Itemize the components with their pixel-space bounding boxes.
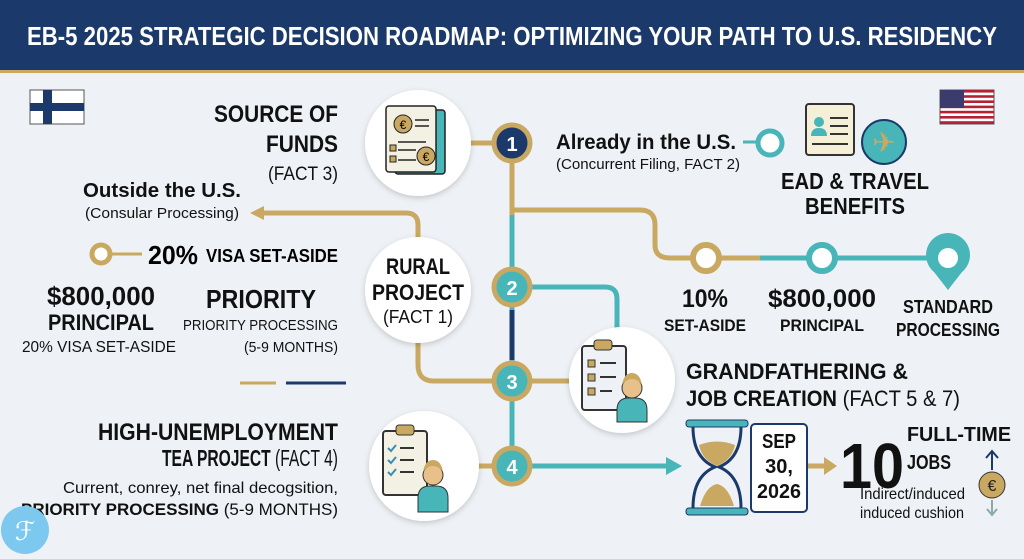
text: already in the US: [556, 131, 782, 173]
text: €: [400, 118, 407, 132]
icon: clipboard person (grandfathering): [569, 327, 675, 433]
icon: clipboard person (TEA): [369, 411, 479, 521]
date box: 2026: [757, 481, 801, 503]
date box: SEP: [762, 431, 796, 453]
10 full-time jobs: JOBS: [907, 452, 951, 474]
standard track nodes: [693, 233, 970, 290]
rural project circle: RURAL: [386, 254, 450, 279]
text: high unemployment: PRIORITY PROCESSING (5-9 MONTHS): [21, 500, 338, 519]
text: grandfathering & job creation: GRANDFATHERING &: [686, 359, 908, 384]
priority: [183, 284, 338, 356]
logo: [1, 506, 49, 554]
text: already in the US: (Concurrent Filing, FACT 2): [556, 156, 740, 173]
text: standard processing: [896, 297, 1000, 340]
icon: plane: [862, 120, 906, 164]
step nodes: [494, 125, 530, 484]
text: standard processing: STANDARD: [903, 297, 993, 317]
text: outside the US: (Consular Processing): [85, 205, 239, 222]
10 full-time jobs: 10: [840, 430, 904, 502]
text: 10% set-aside: 10%: [682, 285, 728, 313]
10 full-time jobs: [840, 424, 1011, 522]
priority: PRIORITY PROCESSING: [183, 317, 338, 334]
text: 10% set-aside: SET-ASIDE: [664, 316, 746, 335]
text: high unemployment: [21, 419, 338, 519]
text: high unemployment: HIGH-UNEMPLOYMENT: [98, 419, 338, 446]
icon: hourglass: [686, 420, 748, 515]
header bar: [0, 0, 1024, 73]
text: $800,000 principal right: PRINCIPAL: [780, 316, 864, 335]
logo: ℱ: [15, 517, 35, 547]
text: high unemployment: Current, conrey, net final decogsition,: [63, 480, 338, 497]
text: 10% set-aside: [664, 285, 746, 335]
$800,000 principal left: 20% VISA SET-ASIDE: [22, 339, 176, 356]
icon: euro coin with arrows: [979, 451, 1005, 515]
$800,000 principal left: PRINCIPAL: [48, 310, 154, 335]
text: €: [423, 150, 430, 164]
text: grandfathering & job creation: [686, 359, 960, 411]
text: grandfathering & job creation: JOB CREATION (FACT 5 & 7): [686, 386, 960, 411]
step nodes: 4: [506, 457, 518, 479]
flag: USA: [940, 90, 994, 124]
$800,000 principal left: $800,000: [47, 281, 155, 311]
flag: Finland: [30, 90, 84, 124]
icon: source of funds document: [365, 90, 471, 196]
rural project circle: [365, 237, 471, 343]
priority: (5-9 MONTHS): [244, 339, 338, 356]
connector lines: [262, 143, 935, 466]
text: $800,000 principal right: $800,000: [768, 285, 876, 313]
text: standard processing: PROCESSING: [896, 320, 1000, 340]
20% visa set-aside: VISA SET-ASIDE: [206, 246, 338, 266]
arrow: to outside: [250, 206, 264, 220]
text: already in the US: Already in the U.S.: [556, 131, 736, 154]
text: $800,000 principal right: [768, 285, 876, 335]
text: EAD & travel benefits: BENEFITS: [805, 193, 905, 219]
step nodes: 1: [506, 134, 518, 156]
20% visa set-aside: 20%: [148, 240, 198, 270]
20% visa set-aside: [92, 240, 338, 270]
text: EAD & travel benefits: EAD & TRAVEL: [781, 168, 929, 194]
text: source of funds: [214, 101, 338, 185]
legend lines: [240, 382, 346, 384]
step nodes: 3: [506, 372, 518, 394]
step nodes: 2: [506, 278, 518, 300]
arrow: to jobs: [808, 457, 837, 475]
arrow: to hourglass: [666, 457, 682, 475]
date box: [751, 424, 807, 512]
icon: euro coin with arrows: €: [988, 478, 997, 495]
text: source of funds: SOURCE OF: [214, 101, 338, 128]
rural project circle: (FACT 1): [383, 307, 453, 327]
date box: 30,: [765, 456, 793, 478]
icon: EAD card: [806, 104, 854, 155]
10 full-time jobs: Indirect/induced: [860, 486, 965, 503]
rural project circle: PROJECT: [372, 280, 464, 305]
text: EAD & travel benefits: [781, 168, 929, 219]
$800,000 principal left: [22, 281, 176, 356]
text: outside the US: Outside the U.S.: [83, 180, 241, 202]
text: source of funds: FUNDS: [266, 131, 338, 158]
icon: plane: ✈: [872, 126, 896, 159]
10 full-time jobs: FULL-TIME: [907, 424, 1011, 446]
10 full-time jobs: induced cushion: [860, 505, 964, 522]
text: source of funds: (FACT 3): [268, 164, 338, 185]
text: outside the US: [83, 180, 241, 222]
priority: PRIORITY: [206, 284, 316, 314]
text: high unemployment: TEA PROJECT (FACT 4): [162, 445, 338, 471]
